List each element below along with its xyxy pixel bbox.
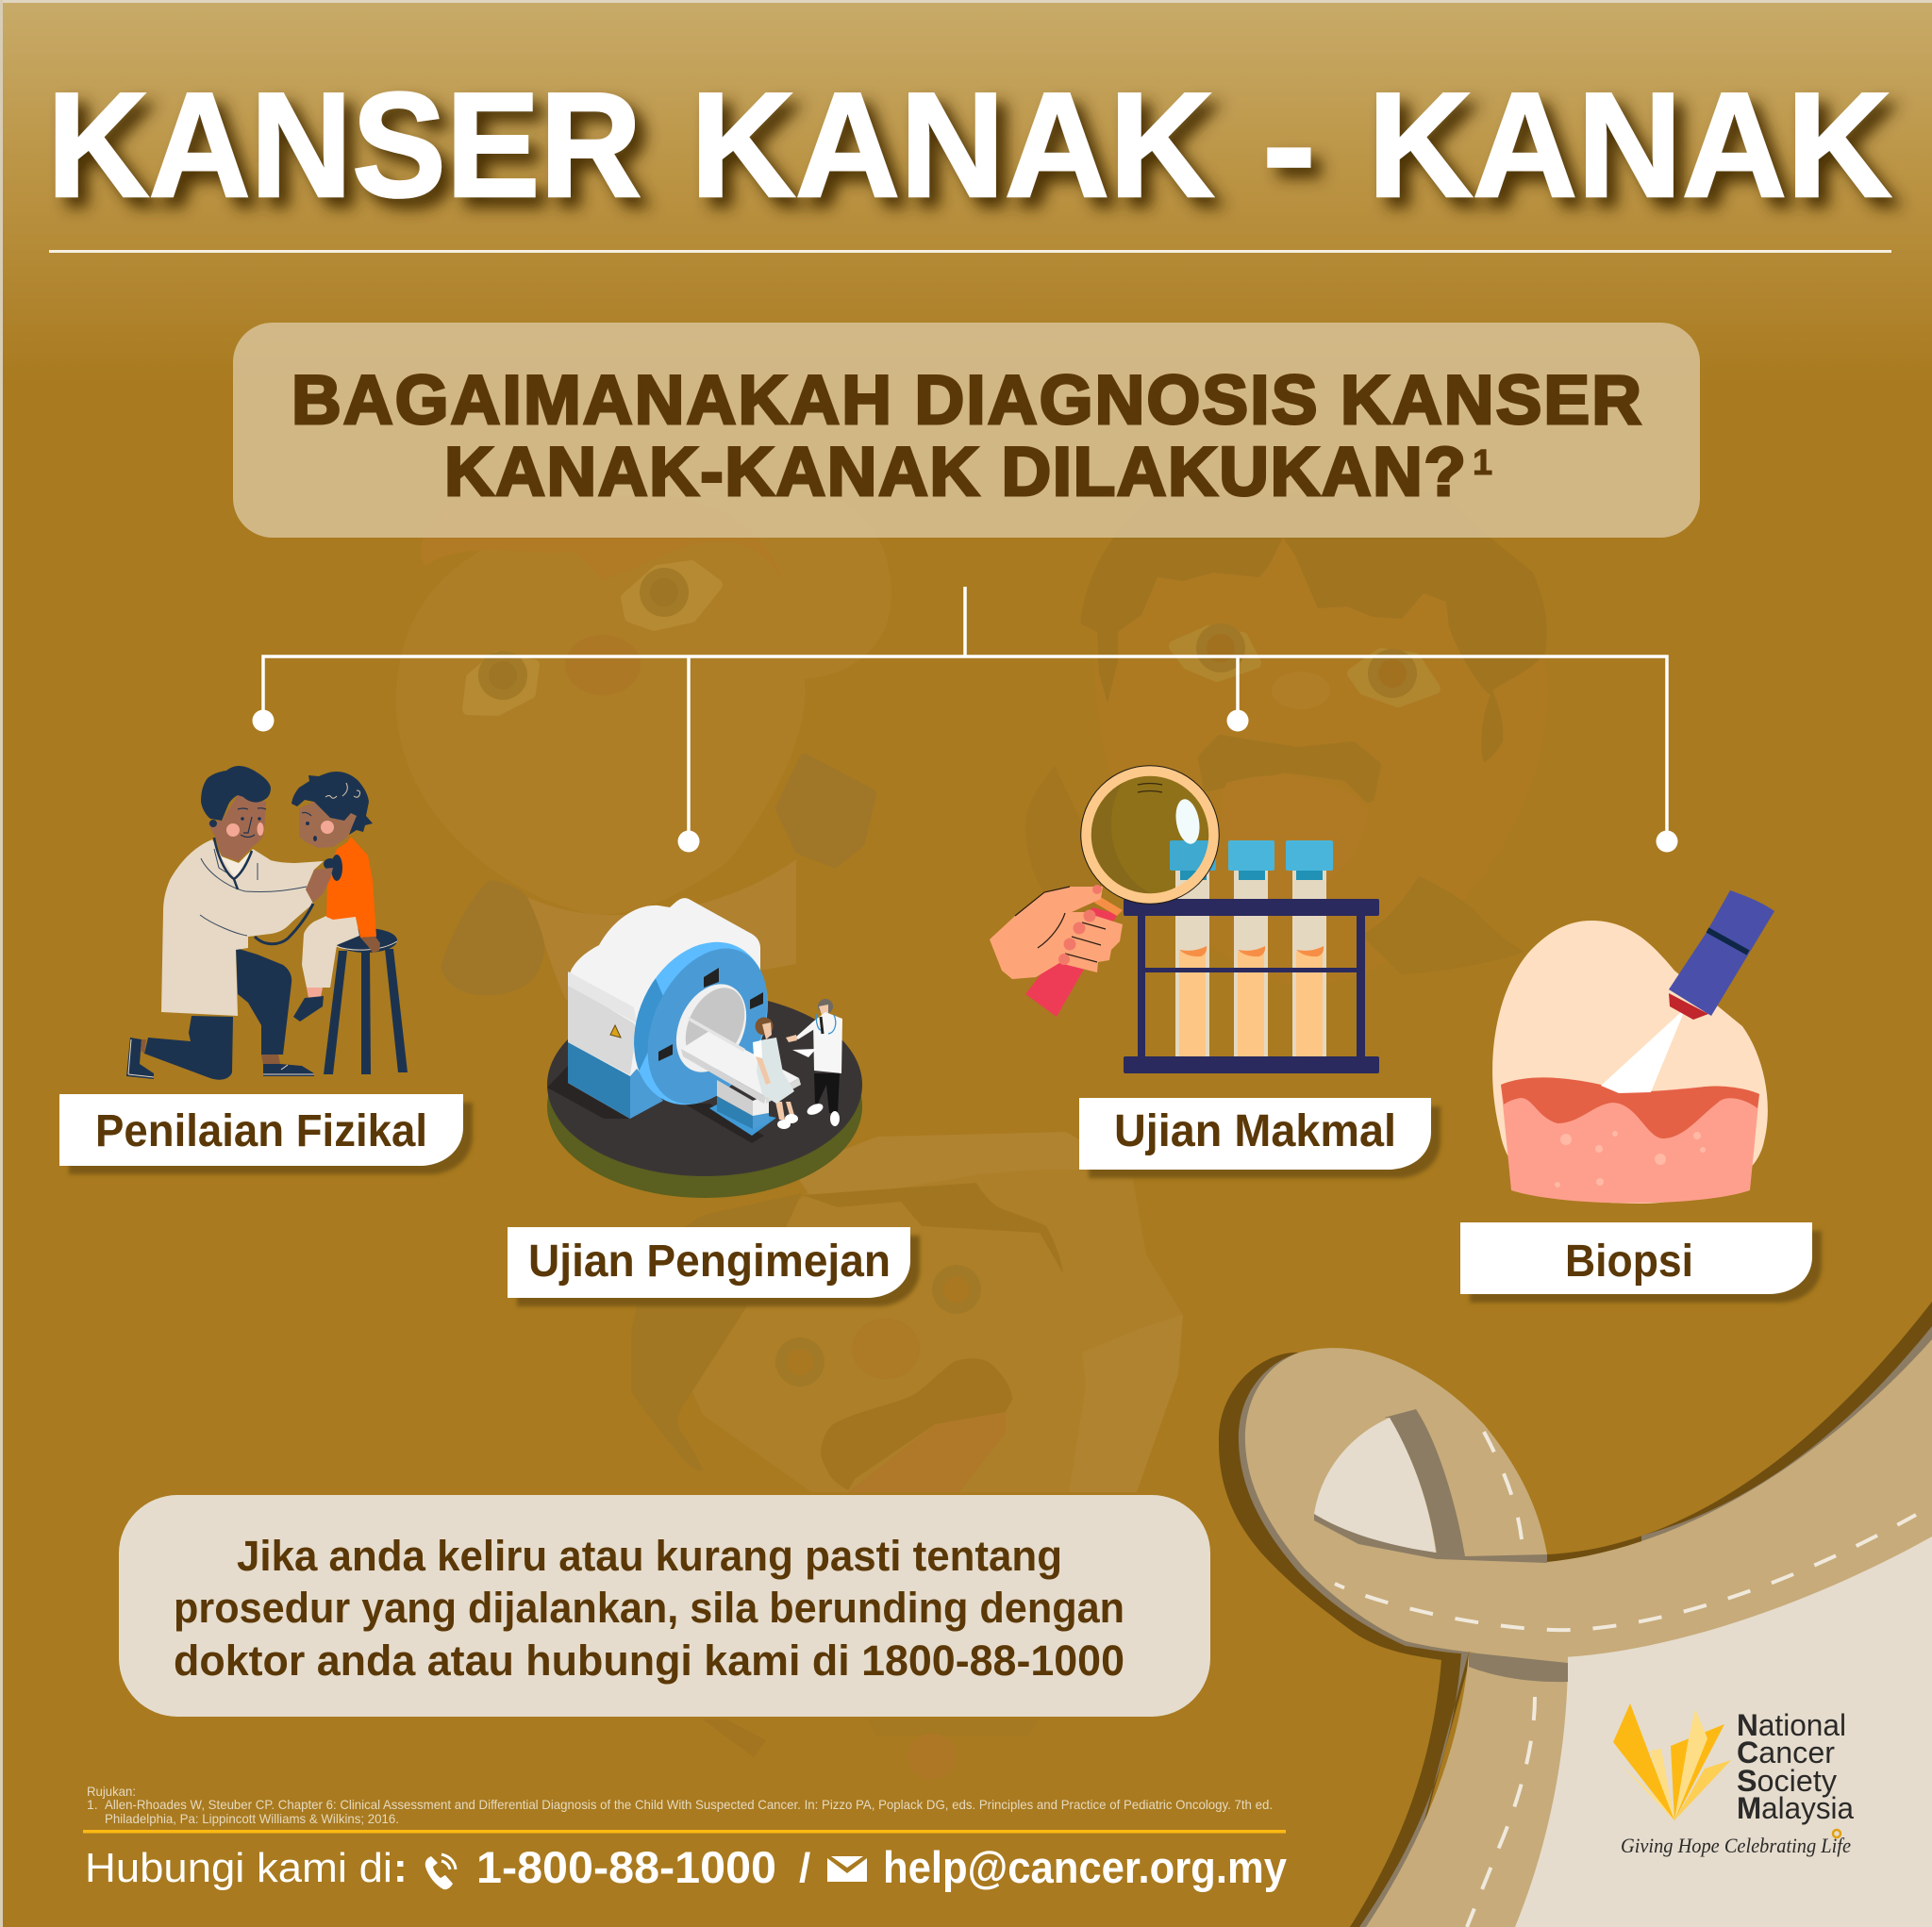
scanner body bbox=[568, 898, 760, 1119]
main loop bbox=[1245, 1339, 1932, 1657]
doctor head bbox=[201, 766, 271, 861]
label: Ujian Makmal: Ujian Makmal bbox=[1114, 1106, 1396, 1156]
logo: National Cancer Society Malaysia bbox=[1613, 1703, 1854, 1857]
icon: phone bbox=[425, 1854, 456, 1889]
contact bar: / bbox=[799, 1845, 810, 1891]
logo petals bbox=[1613, 1703, 1731, 1820]
hand bbox=[990, 885, 1123, 979]
stethoscope bbox=[209, 821, 313, 944]
title: - bbox=[1262, 62, 1316, 228]
title: KANAK bbox=[691, 62, 1214, 228]
biopsy beam bbox=[1601, 1012, 1684, 1093]
references: Allen-Rhoades W, Steuber CP. Chapter 6: Clinical Assessment and Differential Diagnosis of the Child With Suspected Cancer. In: Pizzo PA, Poplack DG, eds. Principles and Practice of Pediatric Oncology. 7th ed. bbox=[105, 1797, 1273, 1812]
question panel bbox=[233, 323, 1700, 538]
test tubes bbox=[1170, 840, 1333, 1056]
label: Ujian Makmal bbox=[1079, 1098, 1441, 1178]
question heading: 1 bbox=[1473, 443, 1492, 483]
doctor coat bbox=[161, 839, 324, 1016]
contact bar: 1-800-88-1000 bbox=[476, 1842, 776, 1892]
ribbon road bbox=[1219, 1302, 1932, 1927]
title: KANSER bbox=[47, 62, 641, 228]
icon: biopsy on skin bbox=[1492, 890, 1774, 1204]
label: Biopsi bbox=[1460, 1222, 1822, 1303]
road dashes bbox=[1335, 1432, 1916, 1927]
logo name: Malaysia bbox=[1737, 1791, 1854, 1825]
references bbox=[87, 1784, 1273, 1826]
contact bar: : bbox=[393, 1845, 408, 1891]
magnifier ring and handle bbox=[1025, 766, 1219, 1017]
face: left child bbox=[396, 490, 891, 1000]
child shirt bbox=[326, 837, 376, 938]
stool bbox=[324, 928, 408, 1074]
callout panel bbox=[119, 1495, 1210, 1717]
callout text: doktor anda atau hubungi kami di 1800-88-1000 bbox=[174, 1636, 1124, 1685]
references: Philadelphia, Pa: Lippincott Williams & Wilkins; 2016. bbox=[105, 1811, 399, 1826]
logo name: National bbox=[1737, 1708, 1846, 1742]
label: Ujian Pengimejan bbox=[508, 1227, 920, 1306]
label: Ujian Pengimejan: Ujian Pengimejan bbox=[528, 1237, 891, 1287]
icon: doctor examining child bbox=[126, 766, 408, 1080]
down strand bbox=[1366, 1653, 1568, 1927]
callout text bbox=[174, 1532, 1124, 1685]
scanner ring bbox=[634, 941, 768, 1105]
title: KANAK bbox=[1368, 62, 1891, 228]
label: Penilaian Fizikal: Penilaian Fizikal bbox=[95, 1106, 427, 1156]
magnifier lens bbox=[1091, 775, 1209, 894]
icon: lab test tubes and magnifier bbox=[990, 766, 1379, 1073]
patient bbox=[753, 1017, 798, 1129]
references: 1. bbox=[87, 1797, 98, 1812]
skin layers bbox=[1501, 1077, 1759, 1204]
logo name: Society bbox=[1737, 1764, 1837, 1798]
face: right child bbox=[1025, 492, 1548, 986]
child trousers bbox=[302, 916, 359, 988]
question heading: BAGAIMANAKAH DIAGNOSIS KANSER bbox=[291, 362, 1641, 439]
question heading: KANAK-KANAK DILAKUKAN? bbox=[444, 434, 1466, 510]
stethoscope chest piece and hand bbox=[306, 855, 342, 903]
references: Rujukan: bbox=[87, 1784, 136, 1799]
test tube rack bbox=[1124, 899, 1379, 1073]
icon: email bbox=[827, 1856, 867, 1882]
cream corner bbox=[1509, 1500, 1932, 1927]
child head bbox=[291, 772, 373, 848]
title bbox=[47, 62, 1891, 228]
contact bar bbox=[85, 1842, 1287, 1892]
label: Biopsi: Biopsi bbox=[1565, 1237, 1693, 1287]
logo name bbox=[1737, 1708, 1854, 1825]
question heading bbox=[291, 362, 1641, 510]
skin mound bbox=[1492, 921, 1768, 1204]
logo name: Cancer bbox=[1737, 1736, 1835, 1769]
patient table bbox=[681, 1017, 801, 1136]
callout text: Jika anda keliru atau kurang pasti tentang bbox=[237, 1532, 1062, 1580]
connector tree bbox=[253, 587, 1677, 853]
loop hole bbox=[1314, 1409, 1547, 1563]
contact bar: Hubungi kami di bbox=[85, 1845, 392, 1891]
child shoe bbox=[293, 996, 324, 1022]
platform bbox=[547, 993, 862, 1198]
face: bottom child bbox=[631, 1132, 1183, 1779]
callout text: prosedur yang dijalankan, sila berunding dengan bbox=[174, 1584, 1124, 1632]
doctor bbox=[786, 999, 842, 1126]
logo spiral bbox=[1833, 1830, 1840, 1837]
biopsy instrument bbox=[1669, 890, 1774, 1020]
background illustration: faded children's faces bbox=[396, 490, 1548, 1779]
doctor trousers and shoes bbox=[126, 948, 314, 1080]
contact bar: help@cancer.org.my bbox=[883, 1842, 1287, 1892]
label: Penilaian Fizikal bbox=[59, 1094, 473, 1174]
strand shadow bbox=[1469, 1653, 1568, 1682]
icon: MRI scanner bbox=[547, 898, 862, 1198]
logo tagline: Giving Hope Celebrating Life bbox=[1621, 1834, 1851, 1857]
ribbon shadows bbox=[1219, 1302, 1932, 1927]
